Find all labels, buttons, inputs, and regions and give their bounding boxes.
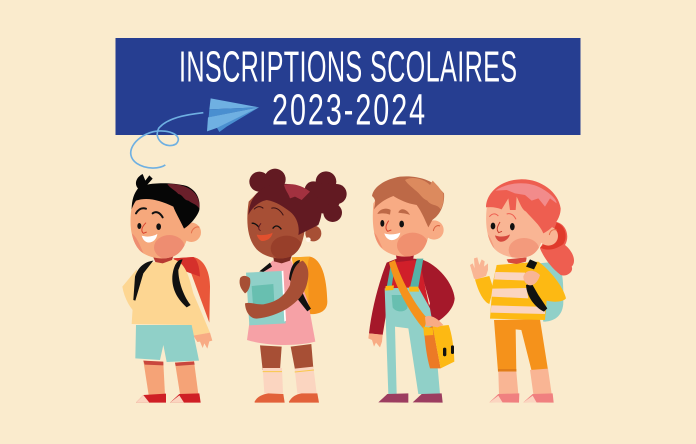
character: boy in overalls with satchel [368,176,455,403]
infographic canvas [116,38,580,403]
character: boy with red backpack [122,174,212,403]
character: girl waving in striped sweater [470,179,574,403]
character: girl with orange backpack and book [240,169,347,403]
title line 1: INSCRIPTIONS SCOLAIRES [179,43,517,91]
title banner [116,38,580,135]
icon: paper plane with looping trail [131,98,259,168]
title line 2: 2023-2024 [272,86,425,134]
